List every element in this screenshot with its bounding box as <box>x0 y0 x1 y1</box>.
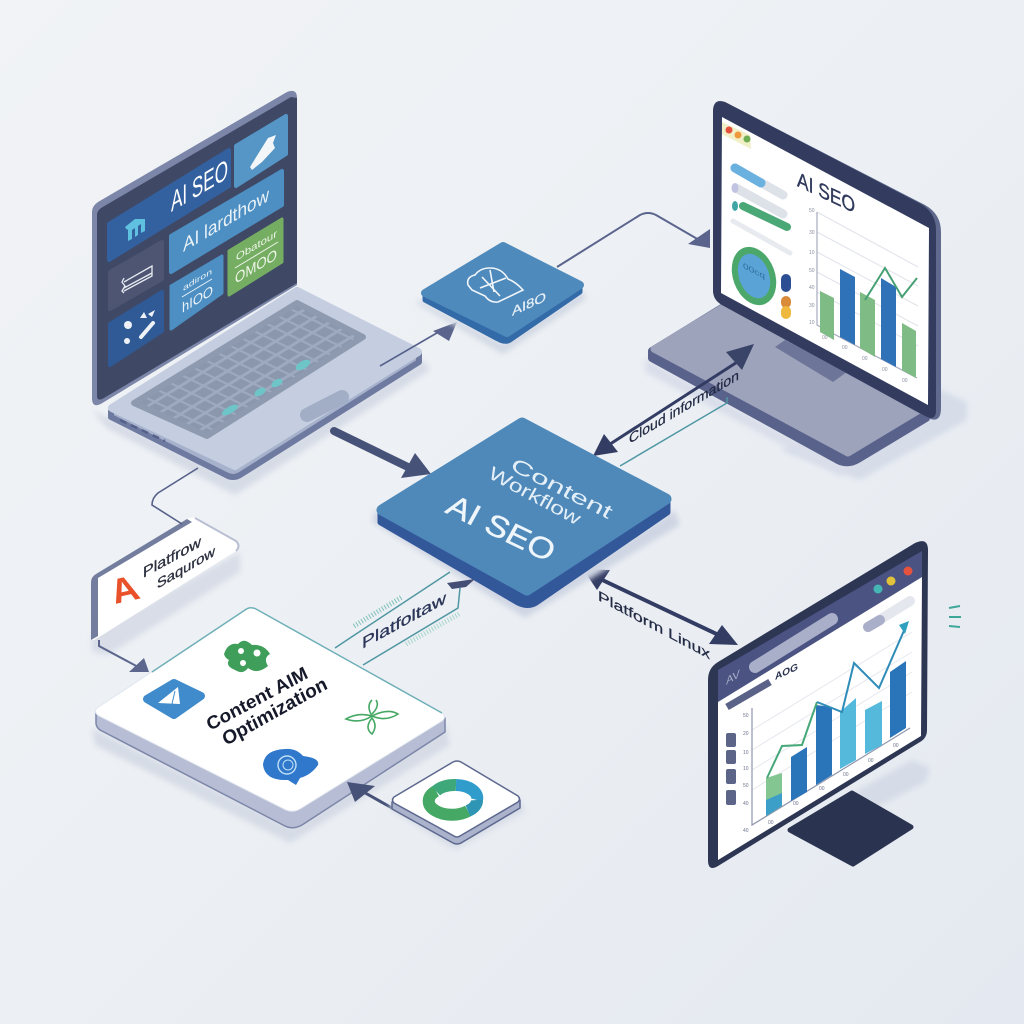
bar chart: 40 <box>809 285 815 291</box>
bar chart: 30 <box>809 230 815 236</box>
bar chart: 00 <box>902 378 908 384</box>
title: Content: Content <box>507 454 617 524</box>
label: AI SO: AI8O <box>512 289 546 319</box>
bar chart: 30 <box>809 303 815 309</box>
arrow: small tile to right laptop <box>557 213 710 267</box>
icon: red A: A <box>105 568 144 611</box>
line and bar chart: 00 <box>843 772 849 778</box>
icon: green cluster <box>224 641 270 672</box>
bar chart: 00 <box>862 356 868 362</box>
donut chart: 00cq <box>743 260 765 281</box>
card: platform gateway <box>91 518 240 655</box>
tile: metric green <box>229 219 282 295</box>
label: platform link: Platform Linux <box>598 588 711 663</box>
tile: AI workflow: AI lardthow <box>183 184 269 257</box>
line and bar chart: 10 <box>743 750 749 756</box>
title: Optimization: Optimization <box>219 673 331 750</box>
arrow: small donut tile to panel <box>347 782 392 808</box>
line and bar chart: 50 <box>743 783 749 789</box>
tile: AI SEO: AI SEO <box>171 153 228 218</box>
tile: metric blue: hIOO <box>182 282 213 317</box>
connector: platform teal rails and arrow <box>335 572 475 665</box>
header bar <box>718 551 922 702</box>
tile: dark blue shapes <box>110 292 162 365</box>
icon: green leaf butterfly <box>346 700 398 734</box>
connector: laptop to platform card <box>152 468 198 524</box>
subtitle: Workflow: Workflow <box>485 462 585 529</box>
title: AI SEO: AI SEO <box>441 489 561 569</box>
screen body <box>718 577 922 860</box>
tile: metric blue <box>171 256 222 329</box>
tile: pen icon <box>236 116 286 186</box>
arrow: central tile to monitor <box>583 569 738 663</box>
bar chart: 50 <box>809 208 815 214</box>
bar chart: 00 <box>822 335 828 341</box>
line and bar chart <box>743 621 912 834</box>
label: content information: Cloud information <box>629 367 739 448</box>
line and bar chart: 00 <box>768 820 774 826</box>
screen content <box>721 117 929 405</box>
icon: blue paper plane tile <box>147 683 201 715</box>
tile: metric green: Obatour <box>236 228 277 264</box>
tile: AI workflow <box>171 171 282 272</box>
arrow: laptop to central tile <box>334 431 431 478</box>
monitor shadow <box>855 760 930 810</box>
central tile: Content Workflow AI SEO <box>372 423 680 618</box>
tile: dark list icon <box>110 242 162 309</box>
window controls and search: AV <box>726 667 740 688</box>
sidebar icons <box>726 733 736 805</box>
bar chart <box>809 208 918 384</box>
line and bar chart: 00 <box>819 786 825 792</box>
title: Content AI: Content AIM <box>203 663 311 735</box>
heading: AI SEO: AI SEO <box>797 167 855 218</box>
laptop base <box>111 290 419 477</box>
donut chart <box>724 241 784 311</box>
bar chart: 10 <box>809 250 815 256</box>
line and bar chart: 10 <box>743 766 749 772</box>
monitor stand <box>790 793 911 864</box>
line and bar chart: 40 <box>743 828 749 834</box>
label: gateway: Saqurow <box>157 543 215 593</box>
bar chart: 00 <box>882 367 888 373</box>
icon: teal spark marks <box>949 606 961 627</box>
line and bar chart: 20 <box>743 731 749 737</box>
window controls and search <box>726 566 912 707</box>
line and bar chart: 50 <box>743 713 749 719</box>
label: platform: Platfoltaw <box>362 588 447 653</box>
icon: bread outline <box>468 268 523 302</box>
window buttons <box>722 122 751 149</box>
monitor bezel <box>708 541 928 868</box>
icon: teal green ring <box>429 785 477 815</box>
arrow: central tile to right laptop, with teal rule <box>593 344 754 466</box>
tile: metric green: OMOO <box>235 246 277 288</box>
panel: Content AI Optimization <box>92 608 450 843</box>
line and bar chart: 40 <box>743 801 749 807</box>
bar chart: 10 <box>809 320 815 326</box>
label: platform: Platfrow <box>143 533 201 582</box>
line and bar chart: 00 <box>868 758 874 764</box>
line and bar chart: 00 <box>893 743 899 749</box>
tile: AI SEO small node <box>418 246 586 354</box>
laptop: right AI SEO report <box>645 101 967 480</box>
laptop: left AI SEO dashboard <box>92 91 430 495</box>
arrow: platform card to content panel <box>99 640 149 672</box>
tile: metric blue: adiron <box>183 266 212 293</box>
sidebar bars <box>732 168 790 253</box>
tile: AI SEO <box>109 150 229 260</box>
legend pills <box>781 274 791 319</box>
line and bar chart: 00 <box>793 801 799 807</box>
laptop screen bezel <box>92 91 297 405</box>
screen bezel <box>713 101 941 420</box>
bar chart: 00 <box>842 345 848 351</box>
bar chart: 50 <box>809 268 815 274</box>
tile: donut icon node <box>390 761 525 850</box>
monitor: analytics chart <box>708 541 930 868</box>
icon: blue chat bubble <box>263 749 318 785</box>
arrow: laptop to small tile <box>380 322 457 366</box>
laptop base <box>652 308 926 462</box>
window controls and search: AOG <box>775 662 798 683</box>
